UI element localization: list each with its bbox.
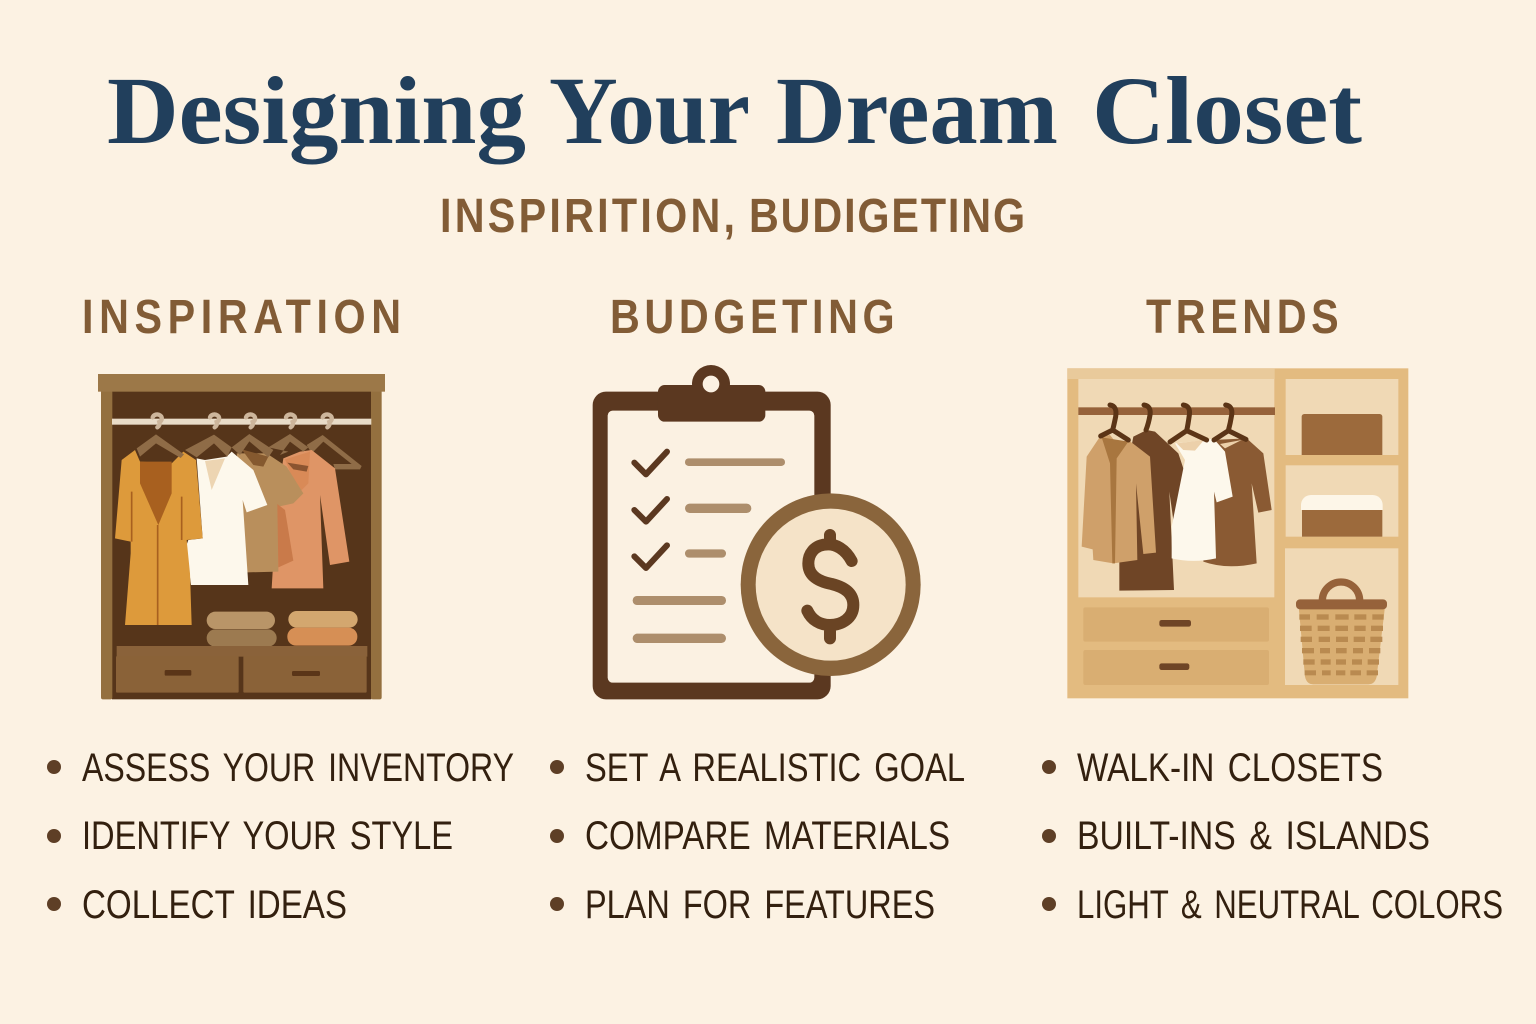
checkmarks [634, 452, 667, 568]
folded clothes stacks [207, 611, 358, 647]
column heading: budgeting: BUDGETING [610, 290, 895, 344]
garment: tan cardigan [1082, 435, 1156, 563]
checklist lines [633, 458, 785, 643]
bullet list: trends: WALK-IN CLOSETS [1077, 746, 1383, 790]
subtitle: BUDIGETING [749, 189, 1025, 243]
bullet list: budgeting: SET A REALISTIC GOAL [585, 746, 965, 790]
hangers [1101, 405, 1246, 442]
title [107, 57, 1362, 164]
garment: white tee [1172, 438, 1233, 561]
title: Closet [1092, 57, 1362, 164]
laundry basket [1296, 582, 1387, 684]
bullet list: inspiration: IDENTIFY YOUR STYLE [82, 814, 453, 858]
bullet list: trends: BUILT-INS & ISLANDS [1077, 814, 1430, 858]
subtitle [440, 189, 1025, 243]
shelf boxes [1301, 414, 1383, 537]
column heading: trends: TRENDS [1146, 290, 1339, 344]
title: Designing [107, 57, 526, 164]
bullet list: trends [1042, 746, 1503, 927]
subtitle: INSPIRITION, [440, 189, 735, 243]
bullet list: budgeting [550, 746, 965, 927]
icon: organized walk-in closet [1067, 368, 1408, 698]
garment: mustard coat [115, 450, 203, 625]
garment: white shirt [186, 452, 267, 585]
bullet list: budgeting: PLAN FOR FEATURES [585, 883, 935, 927]
dollar coin [741, 493, 921, 676]
closet drawers [1083, 607, 1269, 685]
title: Your [549, 57, 750, 164]
bullet list: inspiration: COLLECT IDEAS [82, 883, 347, 927]
garment: peach jacket [272, 450, 349, 588]
garment: tan shirt [237, 453, 303, 572]
column heading: inspiration: INSPIRATION [82, 290, 401, 344]
bullet list: inspiration: ASSESS YOUR INVENTORY [82, 746, 514, 790]
bullet list: inspiration [47, 746, 514, 927]
bullet list: budgeting: COMPARE MATERIALS [585, 814, 950, 858]
drawers [116, 646, 367, 693]
icon: budget clipboard with dollar coin [593, 365, 921, 699]
garment: dark coat [1119, 430, 1193, 591]
icon: open wardrobe with hanging clothes [98, 374, 385, 699]
title: Dream [776, 57, 1058, 164]
garment: brown dress [1203, 438, 1272, 566]
